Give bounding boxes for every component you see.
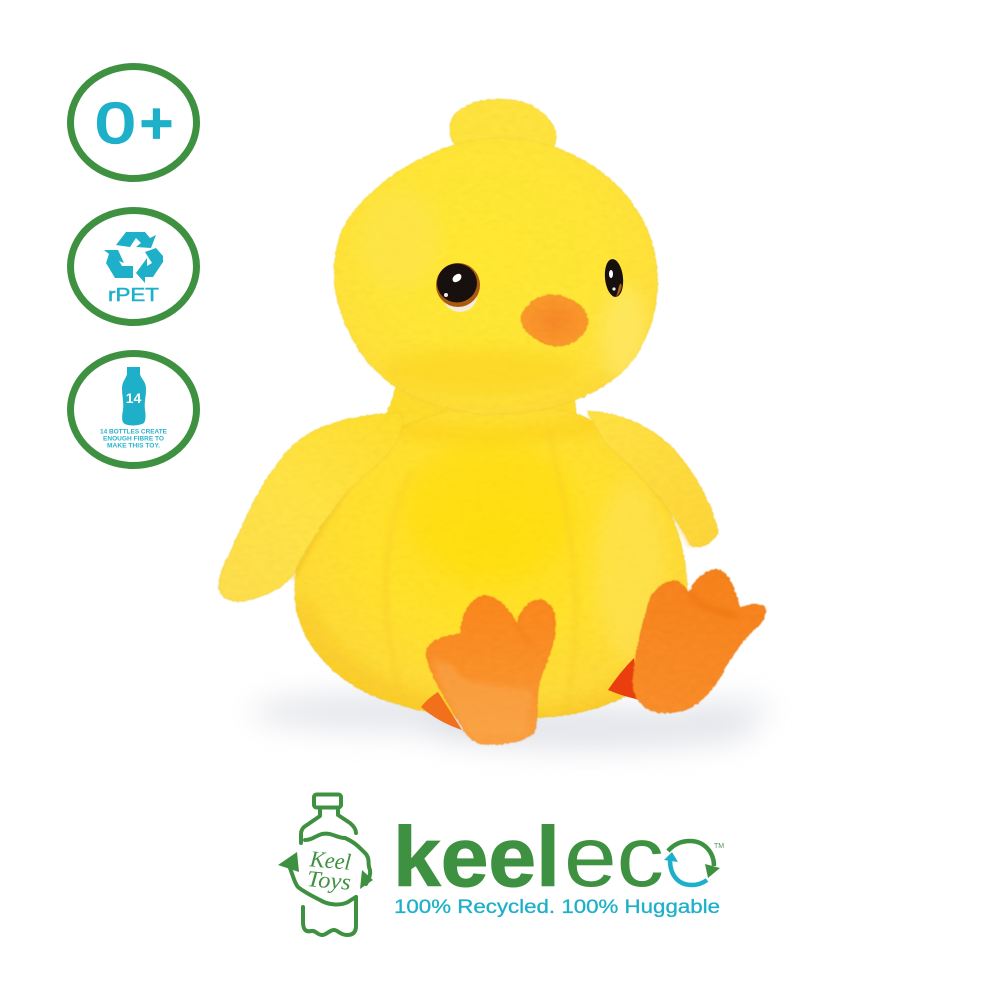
neck [384, 380, 580, 450]
body [294, 405, 688, 719]
bottle caption [100, 430, 167, 450]
head [333, 137, 658, 415]
bottle caption: 14 BOTTLES CREATE [100, 430, 167, 436]
right foot toe crease [689, 592, 738, 616]
bottle count: 14 [126, 390, 141, 406]
Keel Toys wordmark: Keel [308, 846, 352, 875]
trademark: TM [714, 843, 724, 850]
left wing [218, 412, 403, 602]
left foot highlight [432, 660, 532, 735]
Keel Toys wordmark [306, 846, 352, 895]
bottle caption: ENOUGH FIBRE TO [103, 436, 164, 442]
right eye [603, 258, 625, 298]
rPET label: rPET [108, 285, 159, 305]
bottle caption: MAKE THIS TOY. [107, 444, 160, 450]
head tuft [449, 98, 557, 165]
head shading [360, 190, 649, 396]
infographic canvas [67, 63, 768, 937]
badge: 14 bottles [70, 354, 196, 466]
eco wordmark: ec [564, 810, 664, 905]
left foot [425, 595, 556, 745]
icon: recycling arrows [104, 232, 163, 283]
recycling arrowheads [278, 852, 373, 889]
beak [520, 294, 589, 347]
Keel Toys wordmark: Toys [306, 866, 352, 895]
tagline: 100% Recycled. 100% Huggable [394, 897, 720, 918]
left foot toe crease [517, 622, 532, 645]
hidden red foot pieces [421, 658, 640, 730]
badge: age 0+ [70, 66, 196, 178]
left wing shadow [292, 440, 380, 578]
right wing shadow [612, 440, 692, 546]
logo: keeleco [278, 794, 724, 935]
right foot [632, 569, 766, 713]
age label: 0 [96, 91, 135, 155]
left eye [436, 263, 480, 312]
plus sign: + [140, 91, 173, 156]
keel wordmark: keel [393, 810, 560, 904]
badge: rPET recycled [70, 210, 196, 322]
icon: recycled bottle [278, 794, 373, 935]
body seams and shading [300, 420, 665, 720]
plush chick [218, 98, 766, 745]
toy floor shadow [250, 692, 775, 750]
icon: bottle [122, 367, 146, 426]
right wing [585, 410, 719, 547]
